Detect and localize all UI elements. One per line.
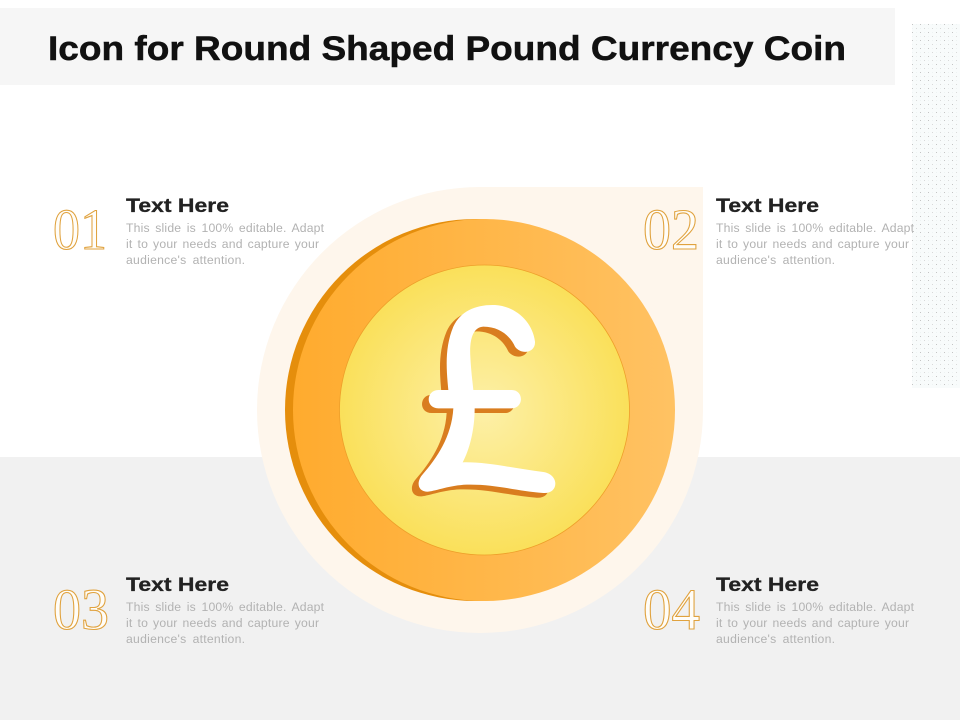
pound symbol shadow <box>412 310 549 498</box>
icon: pound coin <box>285 219 675 601</box>
coin outer ring <box>293 219 675 601</box>
body 02: audience's attention. <box>716 253 835 267</box>
body 02: it to your needs and capture your <box>716 237 909 251</box>
dot pattern panel <box>912 24 960 388</box>
title band <box>0 8 895 85</box>
body 03: audience's attention. <box>126 632 245 646</box>
body 04: audience's attention. <box>716 632 835 646</box>
body 04: it to your needs and capture your <box>716 616 909 630</box>
item 03 <box>53 574 325 646</box>
item 01 <box>53 195 325 267</box>
body 03: it to your needs and capture your <box>126 616 319 630</box>
body 04: This slide is 100% editable. Adapt <box>716 600 915 614</box>
title: Icon for Round Shaped Pound Currency Coin <box>48 30 846 68</box>
bottom grey background band <box>0 457 960 720</box>
coin rim shadow <box>285 219 667 601</box>
body 01: it to your needs and capture your <box>126 237 319 251</box>
coin inner face <box>340 265 630 555</box>
number 02: 02 <box>643 197 699 262</box>
item 04 <box>643 574 915 646</box>
body 02: This slide is 100% editable. Adapt <box>716 221 915 235</box>
heading 02: Text Here <box>716 195 819 217</box>
body 01: audience's attention. <box>126 253 245 267</box>
heading 04: Text Here <box>716 574 819 596</box>
number 04: 04 <box>643 577 700 642</box>
heading 03: Text Here <box>126 574 229 596</box>
teardrop backdrop <box>257 187 703 633</box>
number 01: 01 <box>53 197 107 262</box>
pound symbol <box>419 305 555 493</box>
number 03: 03 <box>53 577 109 642</box>
body 01: This slide is 100% editable. Adapt <box>126 221 325 235</box>
heading 01: Text Here <box>126 195 229 217</box>
item 02 <box>643 195 915 267</box>
body 03: This slide is 100% editable. Adapt <box>126 600 325 614</box>
